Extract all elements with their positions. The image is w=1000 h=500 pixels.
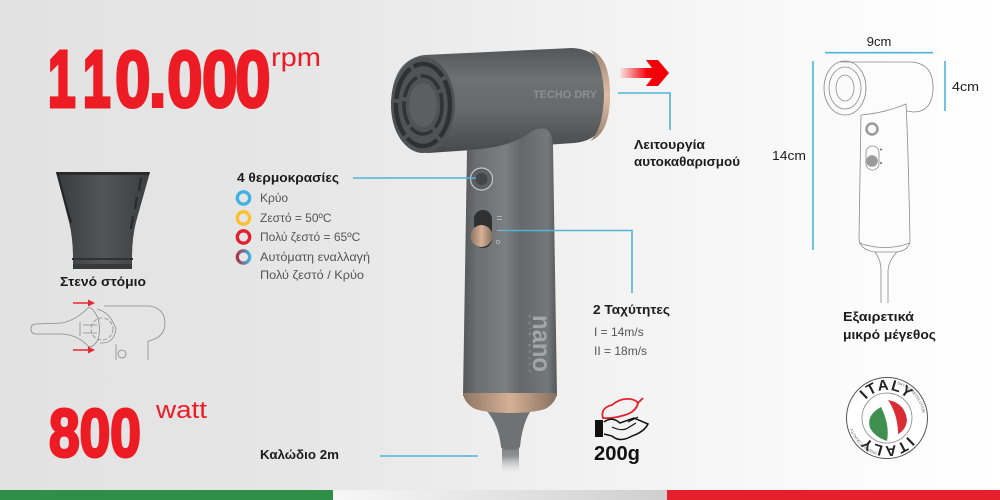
narrow nozzle accessory: [56, 172, 150, 269]
headline: 110.000 rpm: 11: [48, 36, 111, 125]
auto alternate: [237, 250, 370, 282]
weight icon: feather over hand: [595, 398, 648, 440]
speeds block: [593, 302, 670, 358]
speeds block: I = 14m/s: [594, 325, 644, 339]
head barrel: [391, 48, 610, 153]
weight value: 200g: [594, 443, 640, 465]
speeds block: 2 Ταχύτητες: [593, 302, 670, 317]
headline: 800 watt: watt: [155, 397, 207, 424]
exhaust arrow: [620, 60, 669, 86]
self-clean label: Λειτουργία: [634, 137, 705, 152]
depth line: [944, 61, 946, 111]
depth label: 4cm: [952, 79, 979, 94]
auto alternate: Αυτόματη εναλλαγή: [260, 250, 370, 264]
nano logo: HAIR DRYER: [528, 315, 532, 372]
dryer outline: [824, 61, 933, 303]
nozzle fitting sketch: [31, 300, 165, 360]
headline: 110.000 rpm: [48, 35, 321, 125]
air intake grille: [391, 57, 455, 153]
headline: 110.000 rpm: rpm: [271, 42, 321, 72]
size caption: Εξαιρετικά: [843, 309, 914, 324]
Italy badge: [846, 377, 928, 459]
speed leader line: [502, 230, 632, 293]
cold: Κρύο: [260, 191, 288, 205]
temperature settings list: [237, 170, 370, 282]
headline: 800 watt: [49, 396, 207, 472]
cable label: Καλώδιο 2m: [260, 447, 339, 462]
copper base: [463, 393, 557, 413]
size caption: [843, 309, 936, 342]
width line: [825, 52, 933, 54]
Italy badge: DRYING REVOLUTION: [897, 382, 925, 413]
width label: 9cm: [867, 34, 891, 49]
speed slider: [470, 210, 492, 248]
temperature button: [470, 168, 492, 190]
speed marks: [496, 216, 502, 244]
headline: 110.000 rpm: 0.000: [115, 35, 271, 124]
handle: [463, 128, 557, 396]
Italy badge: ITALY: [859, 380, 914, 399]
temperature leader line: [353, 177, 476, 179]
heading: temperatures: 4 θερμοκρασίες: [237, 170, 339, 185]
Italy badge: ITALY: [860, 437, 915, 456]
headline: 800 watt: 800: [49, 396, 141, 472]
self-clean leader line: [618, 93, 670, 130]
cord: [502, 440, 519, 472]
Italy badge: PREMIUM QUALITY: [850, 429, 877, 454]
speeds block: II = 18m/s: [594, 344, 647, 358]
tricolour footer stripe: [0, 490, 1000, 500]
height line: [812, 61, 814, 250]
height label: 14cm: [772, 148, 806, 163]
label: narrow nozzle: Στενό στόμιο: [60, 274, 146, 289]
size caption: μικρό μέγεθος: [843, 327, 936, 342]
cable leader line: [380, 455, 478, 457]
copper end ring: [590, 50, 610, 141]
nano logo: nano: [527, 315, 557, 372]
hot: Πολύ ζεστό = 65ºC: [260, 230, 361, 244]
hair dryer: [391, 48, 610, 472]
auto alternate: Πολύ ζεστό / Κρύο: [260, 268, 364, 282]
warm: Ζεστό = 50ºC: [260, 211, 332, 225]
self-clean label: αυτοκαθαρισμού: [634, 154, 740, 169]
neck: [486, 410, 531, 450]
self-clean label: [634, 137, 740, 169]
brand text: TECHO DRY: [533, 89, 598, 101]
dimensions sketch: [772, 34, 979, 303]
